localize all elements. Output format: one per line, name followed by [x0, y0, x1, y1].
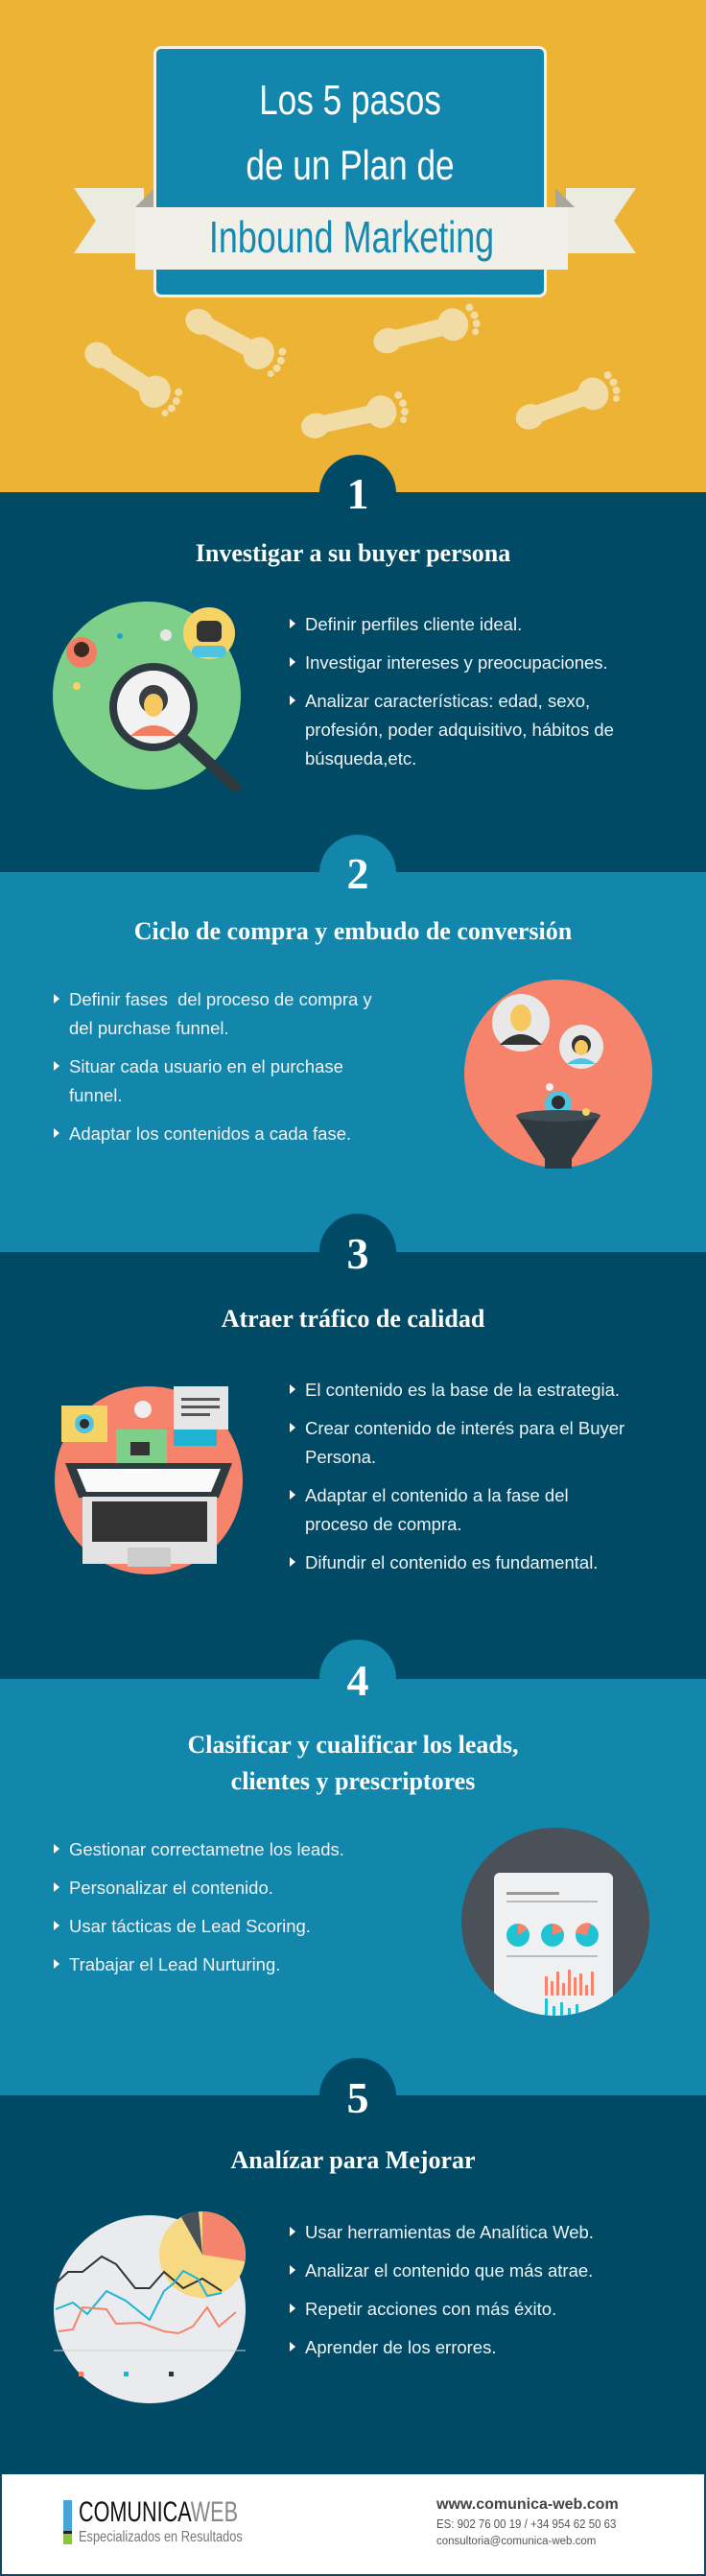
text: 5	[347, 2073, 368, 2122]
text: 4	[347, 1656, 368, 1705]
text: 1	[347, 469, 368, 518]
ribbon band: Inbound Marketing	[209, 212, 494, 262]
section 4	[0, 1679, 706, 2095]
bullets 5: Aprender de los errores.	[305, 2337, 497, 2357]
contact info	[436, 2496, 619, 2547]
bullets 4: Trabajar el Lead Nurturing.	[69, 1954, 280, 1974]
text: 3	[347, 1229, 368, 1278]
logo: COMUNICAWEB	[79, 2496, 238, 2528]
icon: magnifier persona	[53, 602, 241, 792]
bullets 5: Analizar el contenido que más atrae.	[305, 2260, 593, 2281]
section 3	[0, 1252, 706, 1679]
bullets 4: Personalizar el contenido.	[69, 1878, 273, 1898]
bullets 4: Usar tácticas de Lead Scoring.	[69, 1916, 311, 1936]
ribbon band	[135, 207, 568, 270]
bullets 3	[290, 1380, 624, 1572]
title line 2: de un Plan de	[246, 142, 455, 189]
footer	[0, 2474, 706, 2576]
contact info: consultoria@comunica-web.com	[436, 2536, 596, 2547]
section 1	[0, 492, 706, 872]
heading 4: Clasificar y cualificar los leads,	[188, 1731, 518, 1759]
bullets 2	[54, 989, 372, 1144]
header: yellow background	[0, 0, 706, 493]
ribbon tails	[74, 188, 636, 253]
bullets 1: Analizar características: edad, sexo, profesión, poder adquisitivo, hábitos de búsqueda,etc.	[305, 691, 614, 768]
bullets 2: Definir fases del proceso de compra y del purchase funnel.	[69, 989, 372, 1038]
badge 2	[319, 835, 396, 911]
icon: tablet dashboard	[461, 1828, 649, 2016]
badge 5	[319, 2058, 396, 2135]
icon: funnel	[464, 980, 652, 1169]
heading 4	[188, 1731, 518, 1795]
bullets 5: Usar herramientas de Analítica Web.	[305, 2222, 594, 2242]
logo: Especializados en Resultados	[79, 2529, 243, 2545]
bullets 2: Adaptar los contenidos a cada fase.	[69, 1123, 351, 1144]
badge 1	[319, 455, 396, 532]
heading 3: Atraer tráfico de calidad	[222, 1305, 484, 1333]
bullets 3: Difundir el contenido es fundamental.	[305, 1552, 598, 1572]
heading 1: Investigar a su buyer persona	[196, 539, 510, 567]
text: 2	[347, 849, 368, 898]
contact info: www.comunica-web.com	[436, 2496, 619, 2513]
bullets 3: proceso de compra.	[305, 1514, 462, 1534]
bullets 3: Crear contenido de interés para el Buyer Persona.	[305, 1418, 624, 1467]
bullets 1: Definir perfiles cliente ideal.	[305, 614, 522, 634]
icon: laptop content	[55, 1386, 243, 1574]
logo	[63, 2496, 243, 2545]
title box	[153, 46, 547, 297]
section 2	[0, 872, 706, 1252]
bullets 4: Gestionar correctametne los leads.	[69, 1839, 344, 1859]
section 5	[0, 2095, 706, 2474]
bullets 2: Situar cada usuario en el purchase funnel.	[69, 1056, 343, 1105]
bullets 1	[290, 614, 614, 768]
bullets 1: Investigar intereses y preocupaciones.	[305, 652, 608, 673]
heading 2: Ciclo de compra y embudo de conversión	[134, 917, 572, 945]
title line 1: Los 5 pasos	[259, 77, 441, 124]
contact info: ES: 902 76 00 19 / +34 954 62 50 63	[436, 2517, 616, 2531]
heading 4: clientes y prescriptores	[231, 1767, 475, 1795]
bullets 5	[290, 2222, 594, 2357]
badge 3	[319, 1214, 396, 1290]
footprints	[84, 303, 620, 438]
bullets 3: Adaptar el contenido a la fase del	[305, 1485, 569, 1505]
bullets 5: Repetir acciones con más éxito.	[305, 2299, 556, 2319]
badge 4	[319, 1640, 396, 1716]
bullets 4	[54, 1839, 344, 1974]
heading 5: Analízar para Mejorar	[230, 2146, 476, 2174]
bullets 3: El contenido es la base de la estrategia.	[305, 1380, 620, 1400]
icon: analytics chart	[54, 2211, 246, 2403]
